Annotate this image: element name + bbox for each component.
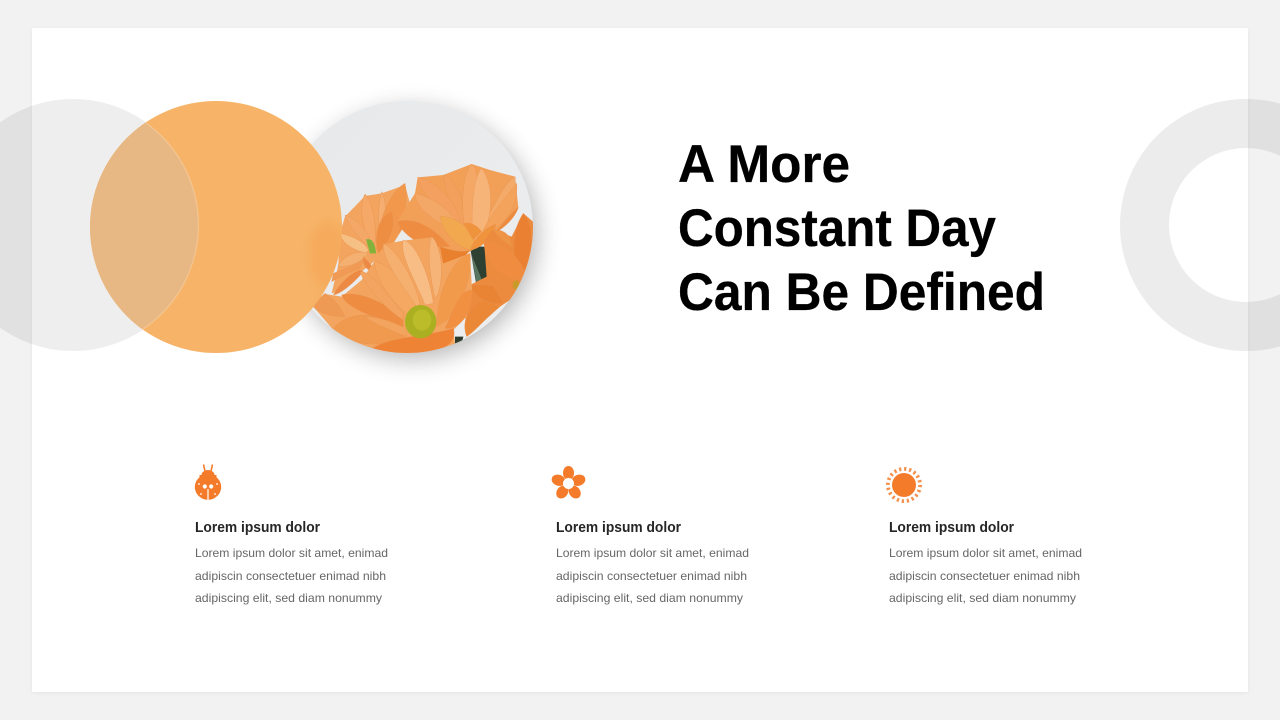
column 3: sun — [888, 469, 1082, 605]
column 1: ladybug — [195, 464, 388, 605]
title — [678, 135, 1045, 322]
body text: adipiscin consectetuer enimad nibh — [889, 569, 1080, 583]
body text: Lorem ipsum dolor sit amet, enimad — [556, 546, 749, 560]
right flower — [465, 213, 535, 337]
decorative grey ring right — [1120, 99, 1280, 351]
main flower — [313, 237, 472, 357]
left flower — [332, 183, 413, 295]
body text: adipiscin consectetuer enimad nibh — [556, 569, 747, 583]
stem — [470, 247, 497, 287]
blurred petals behind glass — [90, 122, 342, 330]
heading: Lorem ipsum dolor — [889, 519, 1014, 536]
body text: adipiscing elit, sed diam nonummy — [889, 591, 1076, 605]
translucent orange circle — [90, 101, 342, 353]
icon: flower — [550, 466, 587, 501]
overlap with grey circle — [90, 122, 199, 330]
title: A More — [678, 135, 850, 194]
body text: adipiscing elit, sed diam nonummy — [556, 591, 743, 605]
icon: ladybug — [195, 464, 221, 500]
photo shadow — [288, 110, 536, 358]
heading: Lorem ipsum dolor — [195, 519, 320, 536]
column 2: flower — [550, 466, 749, 605]
upper flower — [397, 164, 518, 265]
title: Can Be Defined — [678, 263, 1045, 322]
title: Constant Day — [678, 199, 996, 258]
body text — [889, 546, 1082, 605]
body text: Lorem ipsum dolor sit amet, enimad — [195, 546, 388, 560]
body text: adipiscin consectetuer enimad nibh — [195, 569, 386, 583]
photo circle: orange flowers — [312, 106, 533, 353]
body text — [195, 546, 388, 605]
icon: sun — [888, 469, 920, 501]
body text: adipiscing elit, sed diam nonummy — [195, 591, 382, 605]
body text — [556, 546, 749, 605]
body text: Lorem ipsum dolor sit amet, enimad — [889, 546, 1082, 560]
decorative grey circle left — [0, 99, 199, 351]
heading: Lorem ipsum dolor — [556, 519, 681, 536]
